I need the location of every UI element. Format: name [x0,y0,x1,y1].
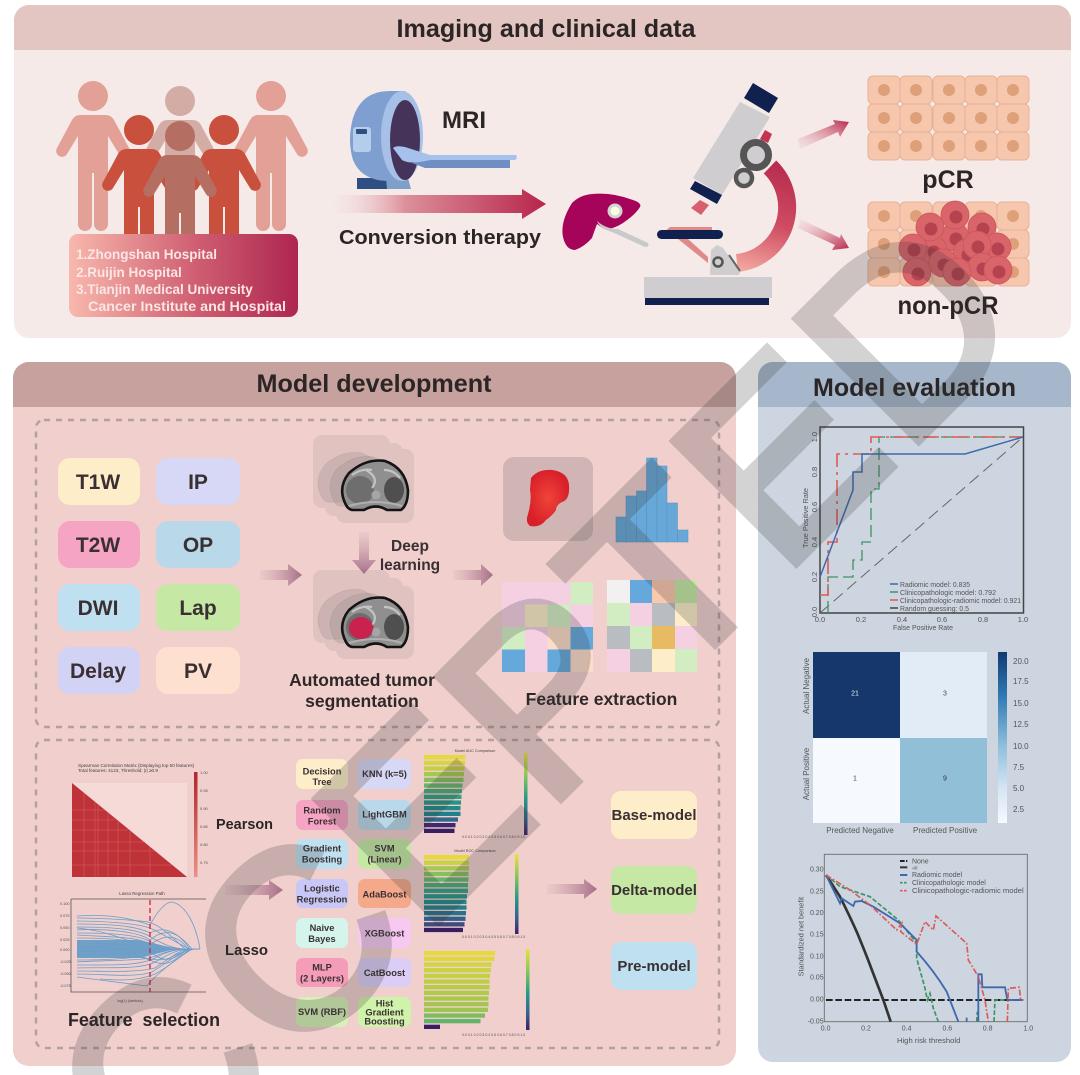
chart: lasso regression path: 0.000 [60,948,70,952]
sequence tags: Delay [70,660,126,683]
chart: decision curves: 0.05 [810,975,824,982]
classifier tags: Logistic [304,884,340,894]
chart: ROC curves: 0.8 [978,615,988,624]
chart: confusion matrix: Actual Negative [802,657,811,714]
panel: model evaluation [758,362,1071,1062]
classifier tags: SVM [374,844,395,854]
legend: ROC: Clinicopathologic-radiomic model: 0.921 [900,598,1021,605]
arrow: to features [453,564,493,586]
label: deep learning: Deep [391,538,429,555]
chart: lasso regression path: -0.025 [60,960,71,964]
heatmap: features one [502,582,593,672]
label: deep learning [380,538,440,574]
bar chart: model comparison three [424,949,530,1037]
bar chart: model comparison two: Model ROC Comparison [454,849,496,853]
label: non-pCR: non-pCR [898,292,998,320]
chart: correlation matrix: 0.90 [200,806,209,811]
chart: confusion matrix: 3 [943,690,947,698]
chart: correlation matrix: Spearman Correlation Matrix (Displaying top 50 features) [78,763,195,768]
label: MRI: MRI [442,107,486,134]
chart: lasso regression path: 0.050 [60,926,70,930]
chart: ROC curves: 0.0 [810,607,819,617]
chart: decision curves: 0.6 [942,1026,952,1033]
sequence tags: Lap [179,597,217,620]
legend: decision curves: Clinicopathologic model [912,880,986,887]
chart: decision curves: 0.30 [810,867,824,874]
classifier tags: XGBoost [365,928,404,938]
arrow: to non-pCR [798,219,849,250]
header bar: model development [13,362,736,407]
chart: confusion matrix: 7.5 [1013,763,1025,772]
icon: liver and scalpel [562,194,649,250]
sequence tags: PV [184,660,212,683]
chart: decision curves: 0.8 [983,1026,993,1033]
arrow: conversion therapy [330,189,546,219]
chart: ROC curves: True Positive Rate [801,488,810,548]
label: automated tumor segmentation: segmentation [305,691,419,711]
chart: decision curves: 0.15 [810,932,824,939]
arrow: to classifiers [225,880,283,900]
classifier tags: Random [303,806,341,816]
chart: ROC curves: 0.2 [856,615,866,624]
classifier tags: Regression [297,894,348,904]
arrow: to pCR [798,120,849,149]
hospital list: 3.Tianjin Medical University [76,282,253,297]
tag: delta-model [611,866,697,914]
bar chart: model comparison three: 0.0 0.1 0.2 0.3 0.4 0.5 0.6 0.7 0.8 0.9 1.0 [462,1033,525,1037]
chart: decision curves: 0.0 [821,1026,831,1033]
arrow: deep learning [352,532,376,574]
panel: model development [13,362,736,1066]
chart: correlation matrix: 1.00 [200,770,209,775]
chart: histogram [616,458,688,542]
chart: decision curves: Standardized net benefit [797,897,806,976]
chart: confusion matrix: 20.0 [1013,657,1029,666]
classifier tags: Naive [310,923,334,933]
chart: decision curves: 0.10 [810,953,824,960]
bar chart: model comparison two: 0.0 0.1 0.2 0.3 0.4 0.5 0.6 0.7 0.8 0.9 1.0 [462,935,525,939]
tag: pre-model [611,942,697,990]
label: feature selection: Feature selection [68,1010,220,1030]
tag: base-model: Base-model [611,807,697,824]
legend: decision curves [900,858,1024,895]
sequence tags: IP [188,471,208,494]
classifier tags [296,759,411,1027]
chart: ROC curves: 0.8 [810,467,819,477]
chart: decision curves: 0.2 [861,1026,871,1033]
chart: confusion matrix: Actual Positive [802,747,811,800]
chart: confusion matrix: 10.0 [1013,742,1029,751]
label: automated tumor segmentation: Automated tumor [289,670,435,690]
label: feature extraction: Feature extraction [526,689,677,709]
chart: decision curves: -0.05 [808,1018,824,1025]
icon: MRI scanner [350,91,517,189]
classifier tags: Gradient [365,1008,404,1018]
classifier tags: Hist [376,998,393,1008]
classifier tags: (2 Layers) [300,974,344,984]
chart: ROC curves: False Positive Rate [893,623,953,632]
sequence tags: T1W [76,471,120,494]
classifier tags: KNN (k=5) [362,769,407,779]
icon: microscope [644,83,787,305]
chart: ROC curves: 0.0 [815,615,825,624]
chart: confusion matrix [802,652,1029,835]
chart: decision curves [797,854,1033,1045]
chart: confusion matrix: 21 [851,690,859,698]
hospital list: 2.Ruijin Hospital [76,265,182,280]
label: Lasso: Lasso [225,943,268,959]
section: segmentation and features [36,420,719,727]
classifier tags: SVM (RBF) [298,1007,346,1017]
icon: MRI stack [313,435,414,523]
classifier tags: AdaBoost [363,890,406,900]
label: conversion therapy: Conversion therapy [339,226,542,249]
chart: ROC curves: 0.4 [810,537,819,547]
classifier tags: Tree [312,777,332,787]
icon: tumor mask [503,457,593,541]
chart: correlation matrix: 0.85 [200,824,209,829]
classifier tags: Decision [303,766,342,776]
chart: ROC curves: 1.0 [810,432,819,442]
chart: lasso regression path: Lasso Regression Path [119,891,165,896]
header bar: model evaluation [758,362,1071,407]
chart: correlation matrix: 0.80 [200,842,209,847]
heatmap: features two [607,580,697,672]
classifier tags: Gradient [303,844,341,854]
heading: imaging and clinical data: Imaging and clinical data [396,15,697,43]
legend: ROC: Radiomic model: 0.835 [900,582,970,589]
classifier tags: LightGBM [362,810,407,820]
chart: confusion matrix: 1 [853,776,857,782]
sequence tags: OP [183,534,213,557]
chart: decision curves: 0.00 [810,997,824,1004]
classifier tags: Forest [308,816,336,826]
chart: decision curves: High risk threshold [897,1036,960,1045]
chart: ROC curves: 0.2 [810,572,819,582]
chart: decision curves: 0.25 [810,888,824,895]
chart: ROC curves: 0.6 [937,615,947,624]
label: pCR: pCR [922,166,974,194]
chart: correlation matrix: 0.75 [200,860,209,865]
chart: confusion matrix: 9 [943,776,947,782]
legend: decision curves: Radiomic model [912,872,963,879]
bar chart: model comparison two [424,849,525,939]
tag: base-model [611,791,697,839]
tag: delta-model: Delta-model [611,882,697,899]
sequence tags: DWI [78,597,118,620]
bar chart: model comparison one [424,749,528,839]
panel: imaging and clinical data [14,5,1071,338]
chart: lasso regression path: 0.075 [60,914,70,918]
icon: pCR cells [868,76,1029,160]
chart: ROC curves: 0.6 [810,502,819,512]
arrow: to models [547,879,597,899]
chart: confusion matrix: 15.0 [1013,699,1029,708]
legend: decision curves: Clinicopathologic-radiomic model [912,888,1024,895]
chart: decision curves: 0.4 [902,1026,912,1033]
legend: ROC [890,582,1021,613]
classifier tags: CatBoost [364,968,405,978]
classifier tags: (Linear) [367,854,402,864]
bar chart: model comparison one: Model AUC Comparison [455,749,495,753]
bar chart: model comparison one: 0.0 0.1 0.2 0.3 0.4 0.5 0.6 0.7 0.8 0.9 1.0 [462,835,525,839]
chart: lasso regression path: 0.100 [60,902,70,906]
classifier tags: Boosting [364,1016,405,1026]
icon: patient group [56,81,308,234]
chart: confusion matrix: 5.0 [1013,784,1025,793]
chart: confusion matrix: Predicted Negative [826,826,894,835]
sequence tags: T2W [76,534,120,557]
hospital list: Cancer Institute and Hospital [88,299,286,314]
chart: lasso regression path: log(λ) (lambda) [117,999,144,1003]
chart: decision curves: 0.20 [810,910,824,917]
chart: confusion matrix: 12.5 [1013,720,1029,729]
tag: pre-model: Pre-model [617,958,691,975]
label: Pearson: Pearson [216,817,273,833]
hospital list [69,234,298,317]
chart: lasso regression path: 0.025 [60,938,70,942]
chart: correlation matrix: Total features: 4123, Threshold: |r| ≥0.9 [78,768,158,773]
heading: model development: Model development [256,370,492,398]
chart: confusion matrix: Predicted Positive [913,826,978,835]
chart: confusion matrix: 17.5 [1013,677,1029,686]
classifier tags: Bayes [308,934,336,944]
hospital list: 1.Zhongshan Hospital [76,247,217,262]
legend: ROC: Clinicopathologic model: 0.792 [900,590,996,597]
chart: correlation matrix [72,763,209,877]
sequence tags [58,458,240,694]
label: automated tumor segmentation [289,670,435,711]
legend: ROC: Random guessing: 0.5 [900,606,969,613]
icon: segmented MRI stack [313,570,414,659]
chart: ROC curves: 1.0 [1018,615,1028,624]
label: deep learning: learning [380,557,440,574]
classifier tags: MLP [312,962,332,972]
arrow: sequences to scans [260,564,302,586]
legend: decision curves: All [912,865,918,871]
heading: model evaluation: Model evaluation [813,374,1016,402]
classifier tags: Boosting [302,854,342,864]
chart: ROC curves [801,427,1028,632]
legend: decision curves: None [912,858,929,865]
chart: lasso regression path [60,891,206,1003]
chart: lasso regression path: -0.050 [60,972,71,976]
chart: decision curves: 1.0 [1023,1026,1033,1033]
icon: non-pCR cells [868,201,1029,286]
chart: correlation matrix: 0.95 [200,788,209,793]
chart: confusion matrix: 2.5 [1013,805,1025,814]
chart: lasso regression path: -0.075 [60,984,71,988]
section: feature selection and modelling [36,740,719,1048]
chart: ROC curves: 0.4 [897,615,907,624]
header bar: imaging and clinical data [14,5,1071,50]
